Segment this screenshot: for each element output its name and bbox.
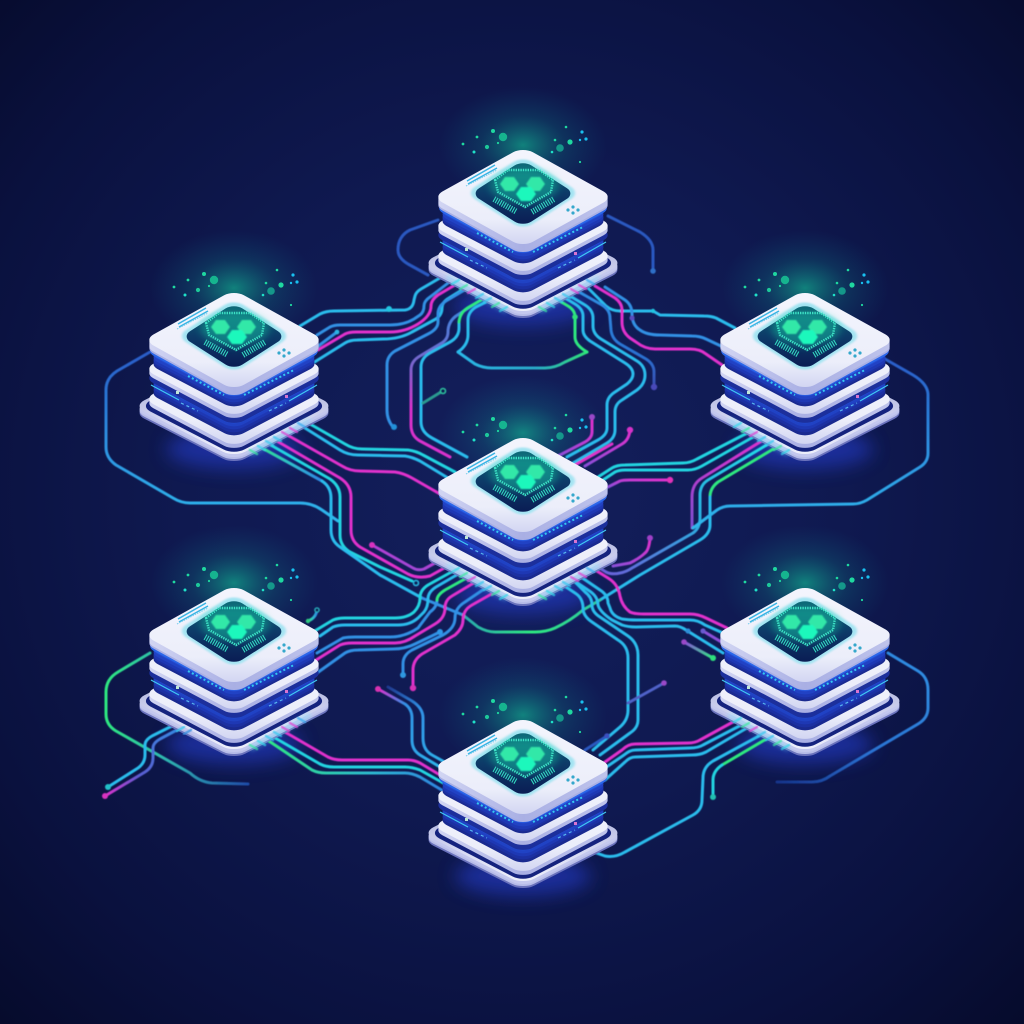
wires: center node to lower-right node — [570, 568, 928, 782]
node: bottom server — [422, 696, 624, 891]
wires: center node to lower-left node — [306, 570, 495, 691]
wires: left node to center node — [106, 352, 455, 598]
wires: top node to left node — [300, 275, 470, 363]
wires: top node to center node, right side — [555, 288, 657, 466]
server stack: lower-left node — [133, 585, 335, 759]
chip: lower-left node — [176, 594, 292, 668]
chip: center node — [465, 444, 581, 518]
node: left server — [133, 269, 335, 464]
wires: lower-right node to bottom node — [582, 717, 773, 856]
wires: top node to center node — [387, 282, 587, 457]
particles: lower-left node — [173, 564, 299, 601]
particles: center node — [462, 414, 588, 451]
server stack: lower-right node — [704, 585, 906, 759]
wires: top node side loops — [398, 216, 656, 275]
server stack: left node — [133, 290, 335, 464]
particles: lower-right node — [744, 564, 870, 601]
node glows — [150, 87, 889, 896]
chip: right node — [747, 299, 863, 373]
wires: center node to bottom node — [560, 582, 667, 755]
server stack: top node — [422, 147, 624, 321]
server stack: center node — [422, 435, 624, 609]
node: lower-right server — [704, 564, 906, 759]
server stack: right node — [704, 290, 906, 464]
circuit wires — [102, 216, 928, 856]
chip: top node — [465, 156, 581, 230]
wires: lower green loop around center node — [422, 598, 600, 632]
chip: lower-right node — [747, 594, 863, 668]
chip: left node — [176, 299, 292, 373]
chip: bottom node — [465, 726, 581, 800]
particles: left node — [173, 269, 299, 306]
wires: top node to right node — [585, 285, 735, 365]
wires: center node to right node — [590, 359, 928, 600]
particles: right node — [744, 269, 870, 306]
particles: bottom node — [462, 696, 588, 733]
particles: top node — [462, 126, 588, 163]
wires: lower-left node to bottom node — [102, 653, 450, 799]
node: top server — [422, 126, 624, 321]
server stack: bottom node — [422, 717, 624, 891]
node: lower-left server — [133, 564, 335, 759]
node: center server — [422, 414, 624, 609]
node: right server — [704, 269, 906, 464]
